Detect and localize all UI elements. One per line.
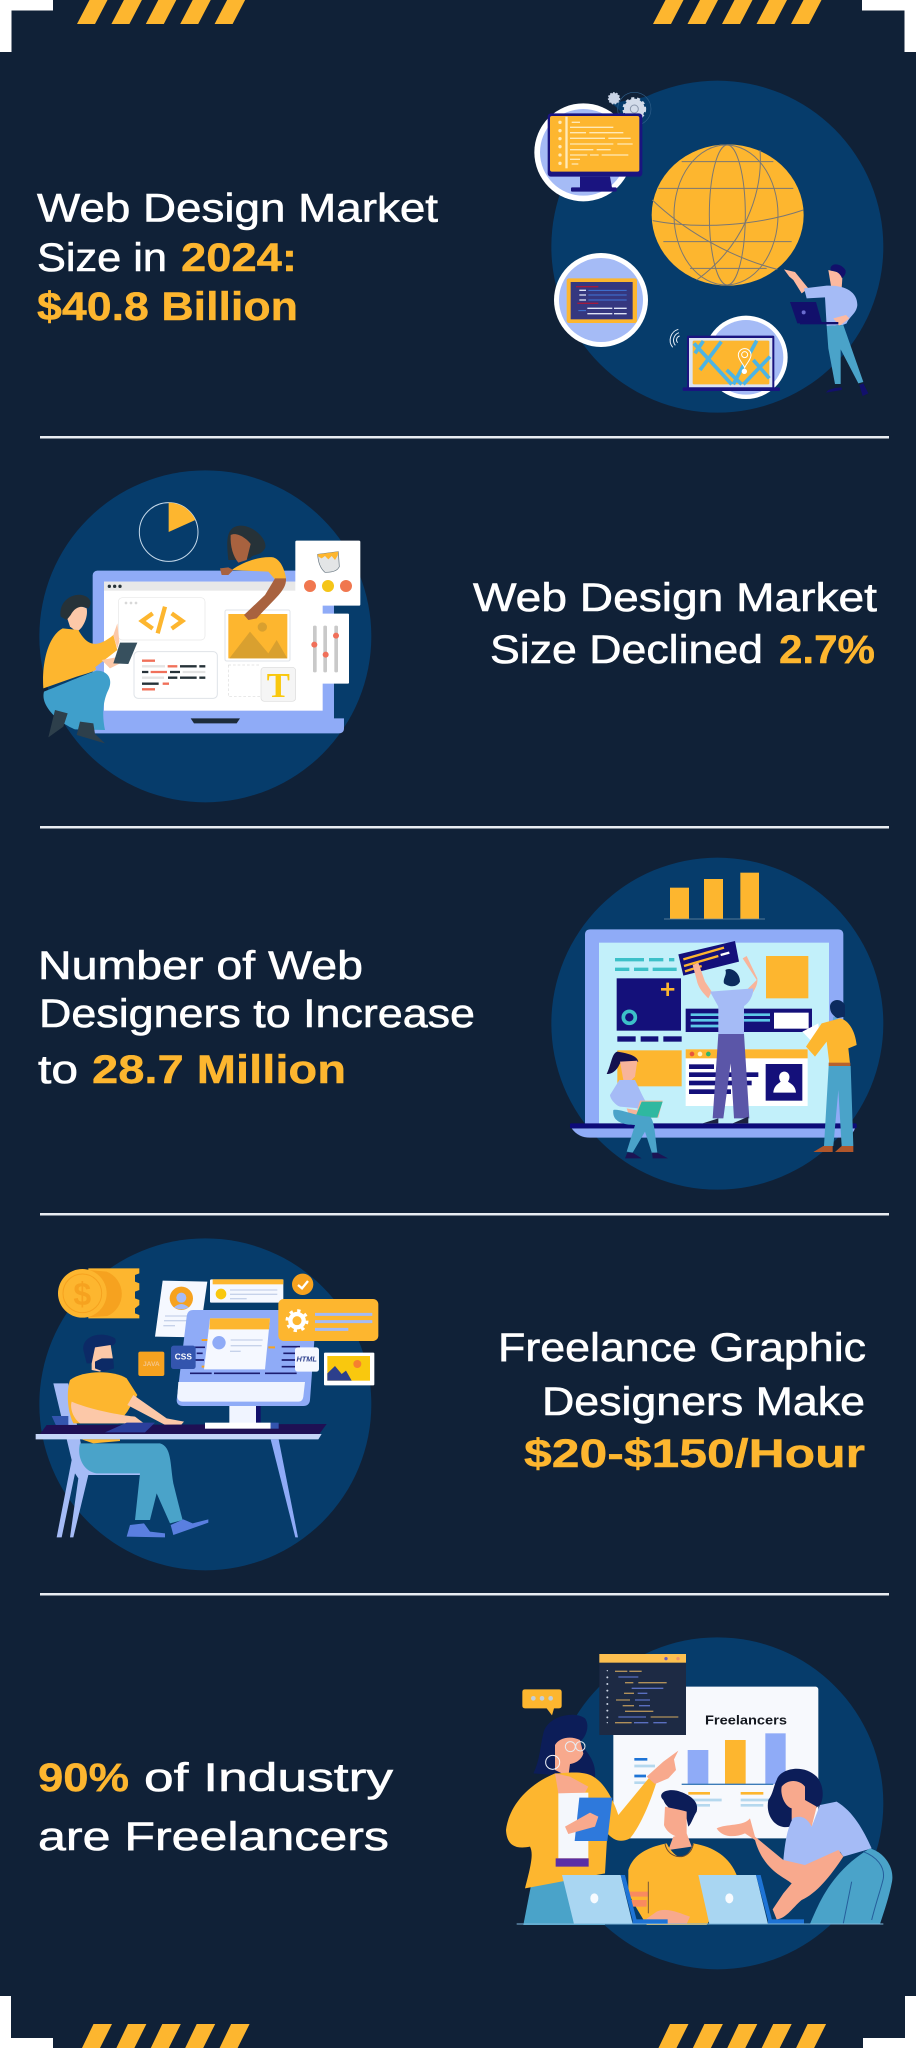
corner bracket: bottom left xyxy=(0,1996,53,2048)
panel 1 heading: market size xyxy=(37,186,438,329)
stripes: bottom right xyxy=(658,2024,826,2048)
illustration 5: freelancers meeting xyxy=(506,1637,892,1969)
divider line 2 xyxy=(40,826,889,828)
panel 5 heading: freelancer share: of Industry xyxy=(144,1756,393,1800)
panel 1 heading: market size: Web Design Market xyxy=(37,186,438,230)
divider line 4 xyxy=(40,1593,889,1596)
illustration 1: globe and devices xyxy=(534,81,883,413)
panel 2 heading: market decline: Web Design Market xyxy=(473,576,877,620)
panel 3 heading: designer count: 28.7 Million xyxy=(92,1048,346,1092)
illustration 4: designer at desk: $ xyxy=(73,1276,91,1312)
panel 3 heading: designer count: to xyxy=(38,1048,78,1092)
panel 4 heading: freelance pay: Designers Make xyxy=(542,1380,865,1424)
panel 4 heading: freelance pay: $20-$150/Hour xyxy=(524,1432,865,1476)
illustration 4: designer at desk xyxy=(36,1238,378,1570)
panel 5 heading: freelancer share: 90% xyxy=(38,1756,129,1800)
panel 5 heading: freelancer share xyxy=(38,1756,393,1859)
divider line 3 xyxy=(40,1213,889,1216)
panel 1 heading: market size: Size in xyxy=(37,236,167,280)
stripes: bottom left xyxy=(82,2024,250,2048)
panel 3 heading: designer count: Number of Web xyxy=(38,944,363,988)
panel 4 heading: freelance pay: Freelance Graphic xyxy=(498,1326,866,1370)
stripes: top right xyxy=(653,0,822,24)
illustration 4: designer at desk: HTML xyxy=(296,1355,317,1364)
panel 4 heading: freelance pay xyxy=(498,1326,866,1476)
panel 3 heading: designer count: Designers to Increase xyxy=(39,992,475,1036)
corner bracket: bottom right xyxy=(863,1996,916,2048)
panel 2 heading: market decline: 2.7% xyxy=(779,628,875,672)
illustration 4: designer at desk: JAVA xyxy=(143,1361,160,1368)
illustration 5: freelancers meeting: Freelancers xyxy=(705,1712,787,1727)
panel 2 heading: market decline: Size Declined xyxy=(490,628,763,672)
illustration 2: designers at laptop: T xyxy=(267,667,290,705)
panel 1 heading: market size: 2024: xyxy=(181,236,297,280)
corner bracket: top left xyxy=(0,0,53,52)
corner bracket: top right xyxy=(862,0,916,52)
illustration 4: designer at desk: CSS xyxy=(175,1351,192,1361)
illustration 3: team building a webpage xyxy=(551,858,883,1190)
divider line 1 xyxy=(40,436,889,438)
panel 3 heading: designer count xyxy=(38,944,475,1092)
panel 5 heading: freelancer share: are Freelancers xyxy=(38,1815,389,1859)
illustration 2: designers at laptop xyxy=(39,470,371,802)
panel 1 heading: market size: $40.8 Billion xyxy=(37,285,298,329)
panel 2 heading: market decline xyxy=(473,576,877,672)
stripes: top left xyxy=(77,0,245,24)
